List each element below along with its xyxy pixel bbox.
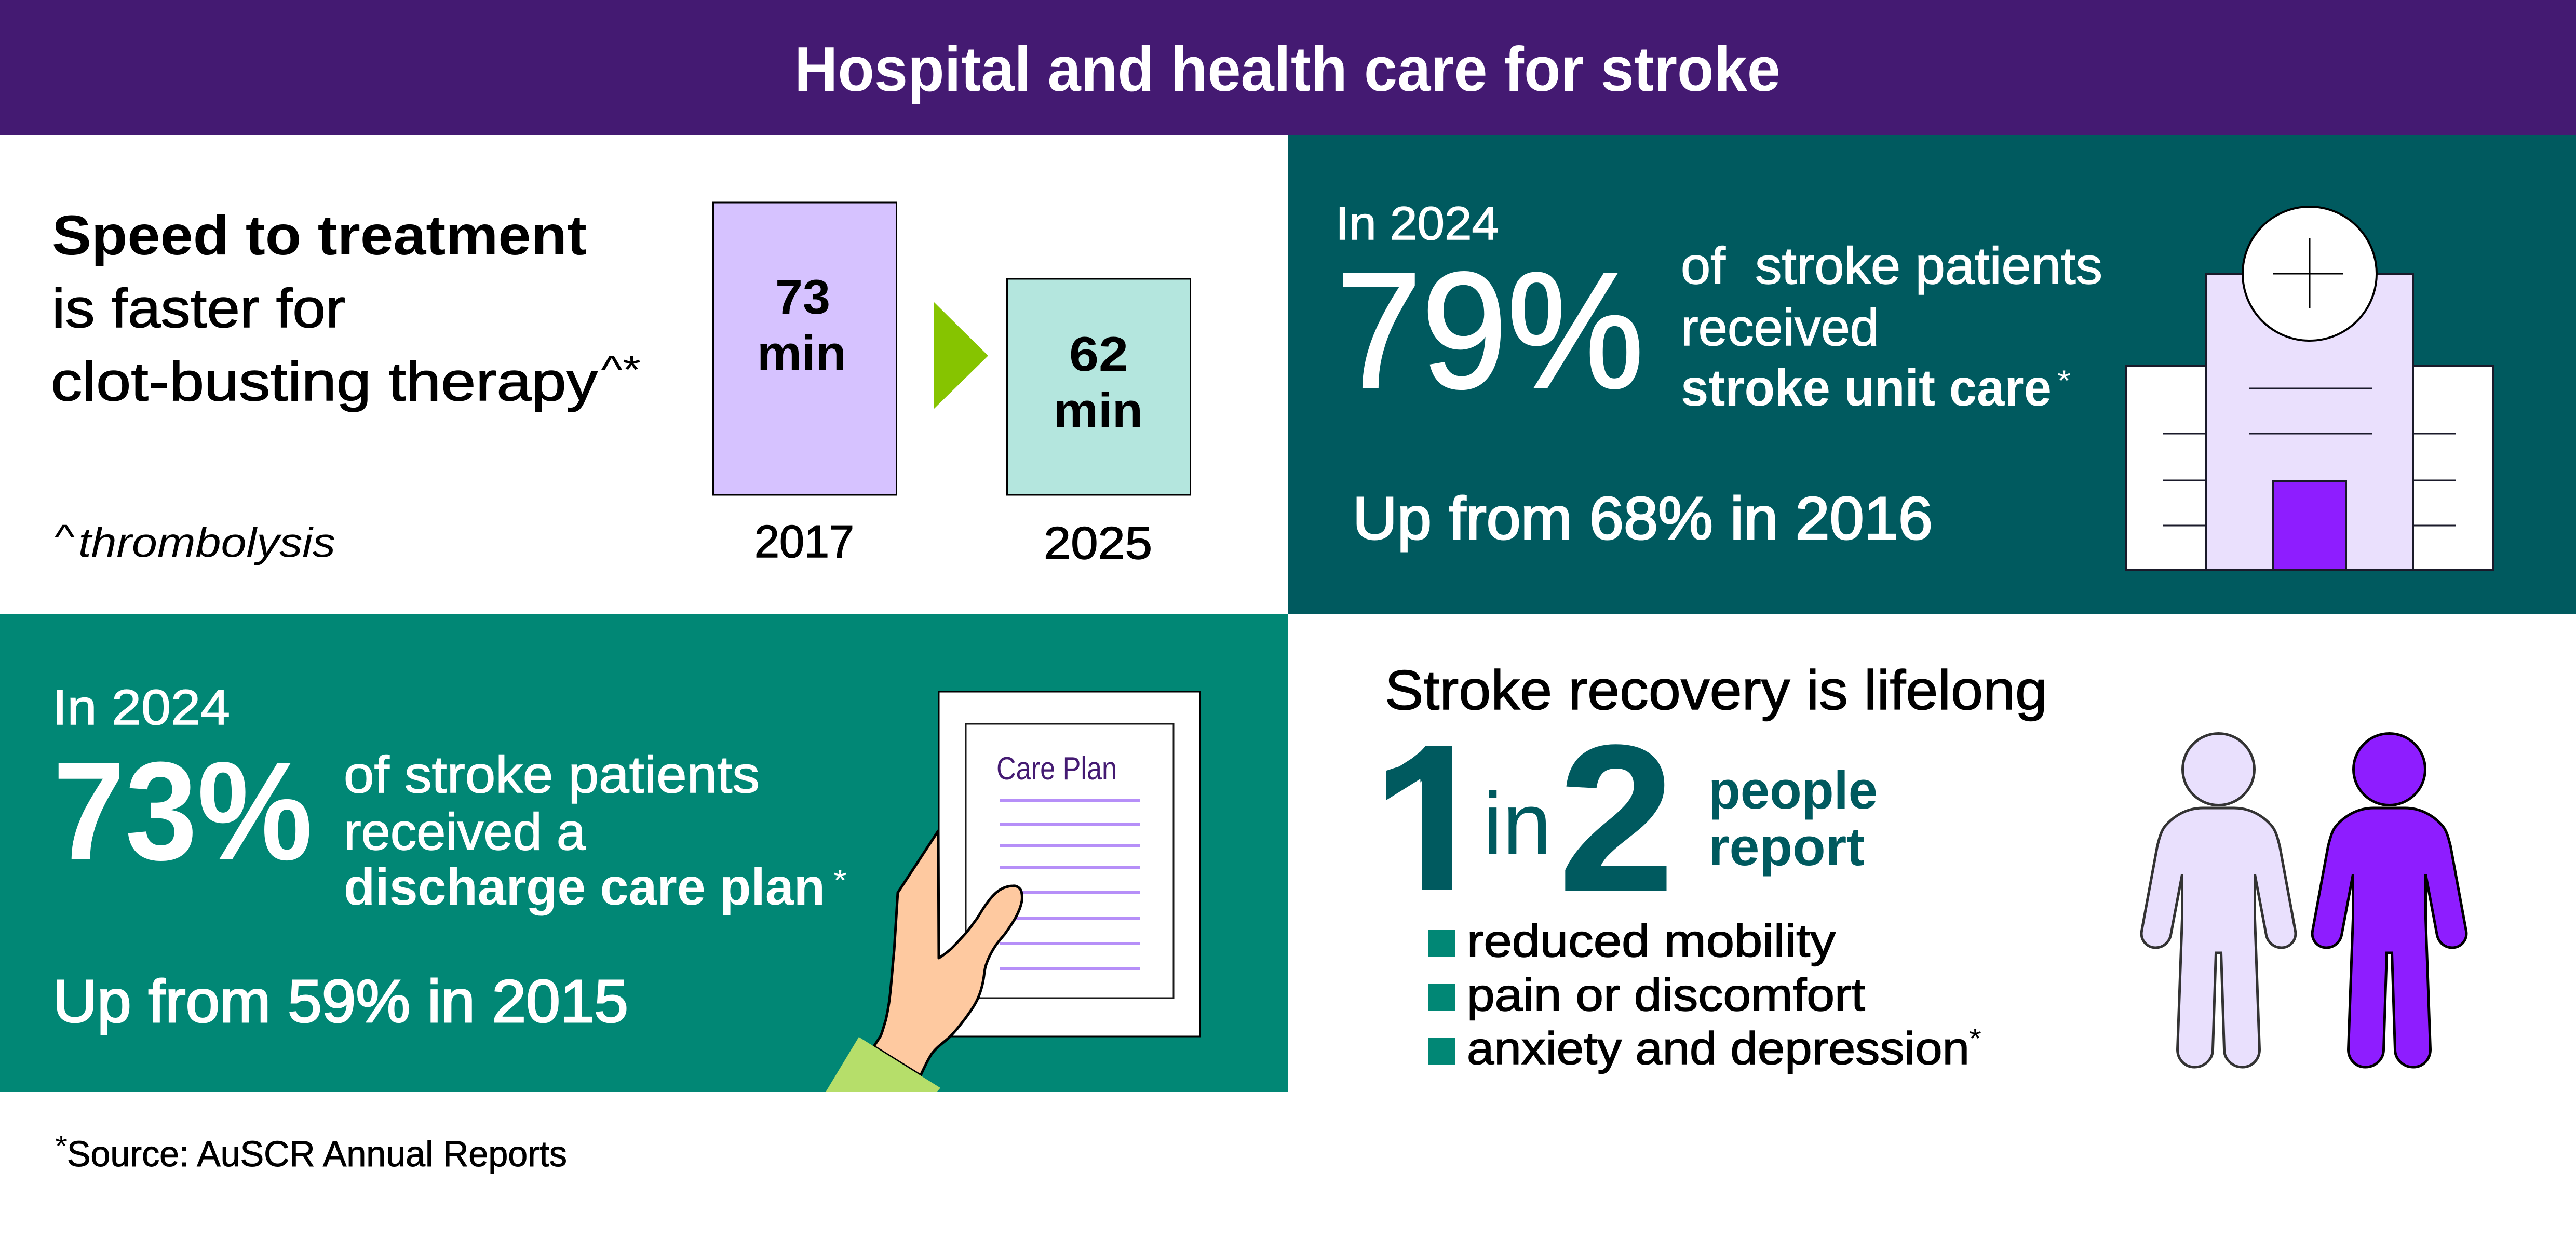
statistic description: received — [1681, 299, 1879, 357]
bullet list: reduced mobility — [1467, 915, 1836, 966]
trend: Up from 68% in 2016 — [1353, 484, 1933, 552]
statistic: 1 in 2: 2 — [1559, 702, 1674, 934]
bar: 2025: 62 — [1069, 327, 1128, 381]
label: people report: people — [1708, 760, 1878, 820]
document title: Care Plan — [996, 751, 1117, 787]
statistic description: discharge care plan — [344, 858, 825, 916]
panel: stroke recovery — [1386, 668, 2467, 1074]
arrow — [934, 302, 988, 409]
statistic description: * — [2057, 364, 2071, 397]
statistic: 79%: 79% — [1336, 238, 1644, 423]
statistic description: of stroke patients — [344, 746, 760, 804]
heading: speed to treatment: ^* — [601, 348, 641, 392]
source footnote: * — [55, 1129, 68, 1162]
statistic description — [1681, 237, 2102, 417]
bar: 2017 — [713, 203, 896, 567]
heading: speed to treatment — [51, 204, 641, 412]
bullet list: anxiety and depression — [1467, 1022, 1970, 1074]
statistic description: stroke unit care — [1681, 359, 2052, 417]
bar: 2017: min — [757, 326, 846, 380]
statistic description — [344, 746, 847, 916]
statistic: 1 in 2: 1 — [1376, 702, 1491, 934]
bullet list: * — [1969, 1023, 1981, 1054]
bar: 2025: 2025 — [1044, 517, 1152, 569]
footnote: thrombolysis: ^ — [55, 517, 75, 556]
statistic description: of stroke patients — [1681, 237, 2102, 295]
year label: In 2024 — [52, 680, 230, 735]
bar: 2017: 2017 — [754, 516, 854, 567]
icon: care plan document — [939, 692, 1200, 1036]
panel: stroke unit care — [1288, 135, 2576, 614]
bullet list: pain or discomfort — [1467, 969, 1865, 1020]
icon: hand holding document — [826, 831, 1022, 1092]
header banner — [0, 0, 2576, 135]
heading: Stroke recovery is lifelong — [1385, 658, 2047, 721]
title: Hospital and health care for stroke — [794, 34, 1781, 104]
heading: speed to treatment: is faster for — [52, 278, 345, 339]
footnote: thrombolysis: thrombolysis — [78, 519, 335, 565]
bar: 2025 — [1007, 279, 1190, 569]
statistic: 1 in 2 — [1386, 744, 1667, 891]
year label: In 2024 — [1336, 198, 1499, 250]
icon: person light — [2141, 733, 2296, 1067]
statistic: 73%: 73% — [53, 733, 313, 890]
source footnote: Source: AuSCR Annual Reports — [67, 1134, 567, 1174]
bullet list — [1428, 915, 1981, 1074]
trend: Up from 59% in 2015 — [53, 967, 628, 1035]
bar: 2025: min — [1054, 383, 1143, 437]
heading: speed to treatment: clot-busting therapy — [51, 351, 598, 412]
icon: hospital — [2126, 207, 2493, 570]
statistic description: received a — [344, 803, 586, 861]
bar: 2017: 73 — [775, 270, 830, 324]
statistic description: * — [833, 864, 847, 896]
heading: speed to treatment: Speed to treatment — [52, 204, 587, 266]
sleeve — [826, 1037, 940, 1092]
statistic: 1 in 2: in — [1483, 775, 1552, 873]
label: people report — [1708, 760, 1878, 877]
icon: person purple — [2312, 733, 2466, 1067]
panel: discharge care plan — [0, 614, 1288, 1092]
panel: speed to treatment — [0, 135, 1288, 614]
label: people report: report — [1708, 817, 1865, 877]
